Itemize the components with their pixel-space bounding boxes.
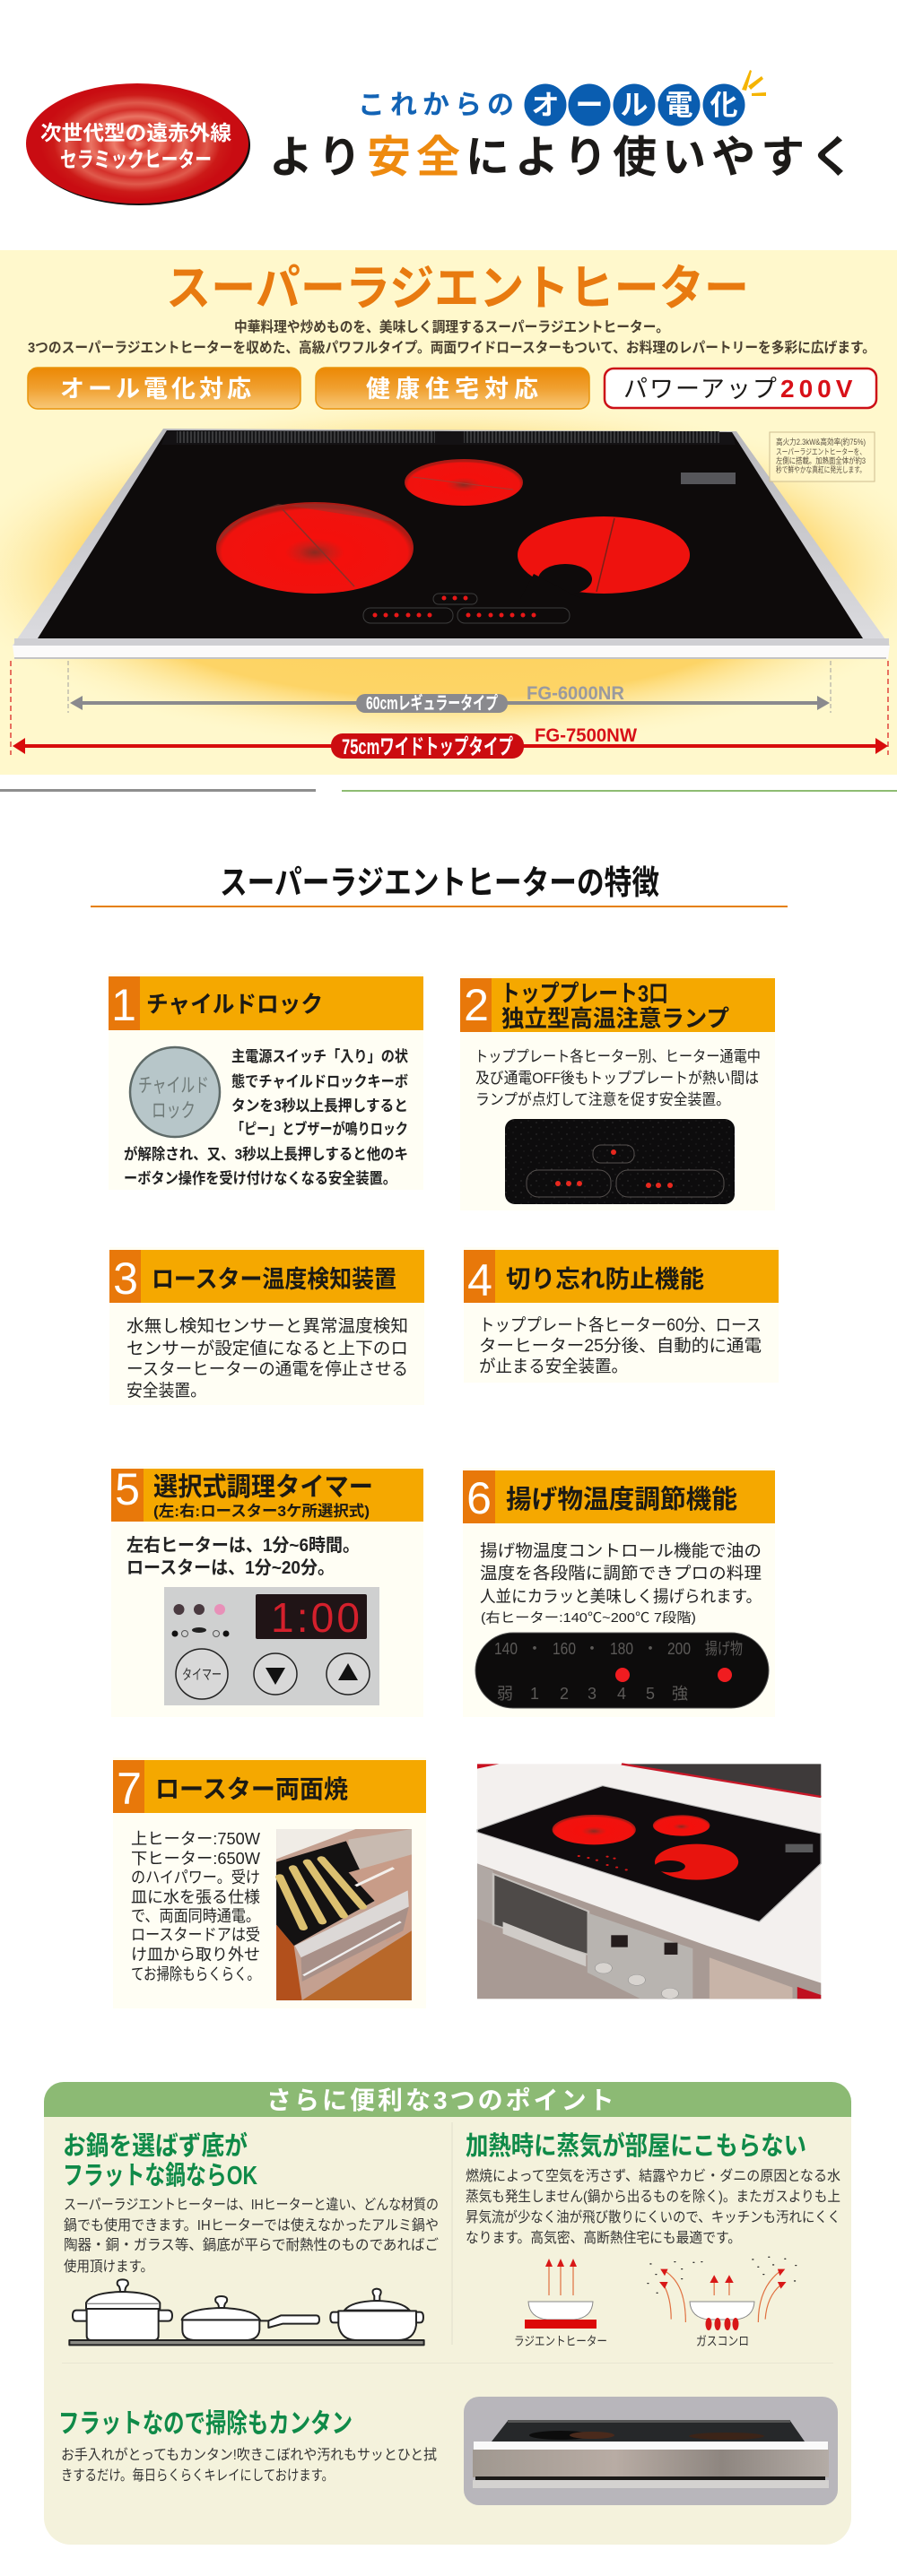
badge: healthy housing compatible: 健康住宅対応: [366, 376, 544, 403]
intro text: 中華料理や炒めものを、美味しく調理するスーパーラジエントヒーター。: [234, 319, 669, 335]
tagline: safer and easier to use: より安全により使いやすく: [269, 134, 859, 182]
caption: high power note: [770, 432, 875, 481]
badge: all-electric compatible: オール電化対応: [60, 376, 255, 403]
card 6: fry temperature control: [463, 1468, 775, 1717]
photo: fry temperature panel: 1: [530, 1685, 539, 1703]
photo: timer panel: 1:00: [271, 1594, 360, 1641]
point: any flat-bottom pot: お鍋を選ばず底が: [63, 2130, 248, 2161]
card 3: roaster temperature detector: [109, 1247, 424, 1405]
badge: all-electric compatible: [28, 368, 300, 409]
card 7: roaster double-sided grilling: てお掃除もらくらく。: [131, 1965, 260, 1983]
photo: kitchen installation: [477, 1764, 821, 1999]
card 7: roaster double-sided grilling: 皿に水を張る仕様: [131, 1888, 260, 1906]
card 1: child lock: チャイルドロック: [146, 991, 323, 1018]
photo: fry temperature panel: ・: [527, 1640, 543, 1658]
card 5: selectable cooking timer: ロースターは、1分~20分。: [126, 1557, 335, 1578]
icon: child lock button: チャイルド: [138, 1074, 209, 1097]
point: any flat-bottom pot: スーパーラジエントヒーターは、IHヒーターと違い、どんな材質の: [64, 2197, 439, 2213]
burner: left: [216, 502, 414, 594]
photo: fry temperature panel: 180: [610, 1640, 633, 1658]
photo: fry temperature panel: 2: [560, 1685, 569, 1703]
point: no steam in the room: 加熱時に蒸気が部屋にこもらない: [466, 2130, 806, 2161]
control panel LEDs: [363, 594, 570, 623]
card 6: fry temperature control: (右ヒーター:140℃~200℃ 7段階): [481, 1610, 696, 1626]
icon: three pots on cooktop: [69, 2279, 424, 2345]
card 1: child lock: 「ピー」とブザーが鳴りロック: [231, 1120, 408, 1138]
card 4: forget-to-turn-off prevention: トッププレート各ヒーター60分、ロース: [479, 1315, 762, 1335]
badge: next-generation far-infrared ceramic heater: セラミックヒーター: [60, 148, 212, 172]
card 5: selectable cooking timer: 5: [115, 1464, 140, 1514]
icon: child lock button: ロック: [152, 1099, 196, 1122]
card 2: top plate high temperature lamps: 独立型高温注意ランプ: [501, 1005, 729, 1032]
photo: front view of cooktop: [464, 2397, 838, 2505]
dimension: 75cm wide top type: FG-7500NW: [535, 725, 637, 746]
burner: rear: [405, 459, 523, 506]
card 2: top plate high temperature lamps: 及び通電OFF後もトッププレートが熱い間は: [475, 1070, 759, 1087]
card 4: forget-to-turn-off prevention: 切り忘れ防止機能: [506, 1266, 704, 1293]
card 4: forget-to-turn-off prevention: 4: [467, 1255, 492, 1305]
dimension: 60cm regular type: FG-6000NR: [527, 683, 624, 704]
tagline: all-electric future: これからの: [358, 91, 519, 120]
point: no steam in the room: なります。高気密、高断熱住宅にも最適です。: [466, 2230, 741, 2246]
card 1: child lock: ーボタン操作を受け付けなくなる安全装置。: [124, 1170, 396, 1187]
card 2: top plate high temperature lamps: トッププレート3口: [501, 980, 668, 1007]
burner: right with notch: [518, 516, 690, 599]
card 3: roaster temperature detector: ロースター温度検知装置: [152, 1266, 396, 1293]
card 6: fry temperature control: 人並にカラッと美味しく揚げられます。: [480, 1587, 762, 1606]
dimension: 60cm regular type: 60cmレギュラータイプ: [366, 693, 498, 714]
photo: timer panel: [164, 1587, 379, 1705]
card 7: roaster double-sided grilling: ロースタードアは受: [131, 1926, 260, 1944]
card 7: roaster double-sided grilling: 7: [117, 1764, 142, 1814]
card 1: child lock: タンを3秒以上長押しすると: [231, 1097, 408, 1115]
icon: child lock button: [130, 1047, 220, 1137]
point: any flat-bottom pot: 鍋でも使用できます。IHヒーターでは使えなかったアルミ鍋や: [64, 2217, 439, 2233]
card 7: roaster double-sided grilling: のハイパワー。受け: [131, 1869, 260, 1886]
heading: features of Super Radiant Heater: スーパーラジエントヒーターの特徴: [220, 864, 659, 901]
photo: fry temperature panel: 5: [646, 1685, 655, 1703]
tagline: all-electric future: オ: [531, 90, 560, 121]
card 7: roaster double-sided grilling: 上ヒーター:750W: [131, 1830, 260, 1848]
card 5: selectable cooking timer: [111, 1464, 423, 1717]
caption: high power note: スーパーラジエントヒーターを、: [776, 447, 866, 456]
card 5: selectable cooking timer: 選択式調理タイマー: [153, 1472, 373, 1502]
card 5: selectable cooking timer: (左:右:ロースター3ケ所選択式): [153, 1503, 370, 1520]
point: flat and easy to clean: お手入れがとってもカンタン!吹きこぼれや汚れもサッとひと拭: [61, 2447, 437, 2463]
badge: next-generation far-infrared ceramic heater: [26, 83, 250, 205]
card 3: roaster temperature detector: ースターヒーターの通電を停止させる: [126, 1359, 408, 1379]
caption: high power note: 左側に搭載。加熱面全体が約3: [776, 455, 866, 465]
point: no steam in the room: 昇気流が少なく油が飛び散りにくいので、キッチンも汚れにくく: [466, 2209, 840, 2225]
caption: high power note: 高火力2.3kW&高効率(約75%): [776, 437, 866, 447]
card 3: roaster temperature detector: センサーが設定値になると上下のロ: [126, 1339, 408, 1358]
badge: power up 200V: 200V: [780, 375, 857, 403]
tagline: all-electric future: [358, 70, 766, 126]
tagline: all-electric future: ル: [621, 90, 648, 121]
card 4: forget-to-turn-off prevention: [464, 1247, 779, 1383]
badge: power up 200V: [605, 369, 876, 408]
panel: three more convenient points: [44, 2082, 851, 2545]
panel: three more convenient points: さらに便利な3つのポイント: [266, 2086, 617, 2114]
card 7: roaster double-sided grilling: ロースター両面焼: [155, 1775, 348, 1803]
point: any flat-bottom pot: フラットな鍋ならOK: [63, 2161, 257, 2190]
point: flat and easy to clean: きするだけ。毎日らくらくキレイにしておけます。: [61, 2468, 334, 2484]
card 6: fry temperature control: 6: [466, 1473, 492, 1523]
title: Super Radiant Heater: スーパーラジエントヒーター: [166, 262, 749, 316]
card 2: top plate high temperature lamps: ランプが点灯して注意を促す安全装置。: [475, 1091, 730, 1108]
point: no steam in the room: 蒸気も発生しません(鍋から出るものを除く)。またガスよりも上: [466, 2189, 840, 2205]
card 3: roaster temperature detector: 水無し検知センサーと異常温度検知: [126, 1316, 408, 1336]
dimension: 75cm wide top type: 75cmワイドトップタイプ: [342, 735, 513, 759]
card 2: top plate high temperature lamps: トッププレート各ヒーター別、ヒーター通電中: [475, 1048, 761, 1065]
card 7: roaster double-sided grilling: け皿から取り外せ: [131, 1946, 260, 1964]
card 7: roaster double-sided grilling: 下ヒーター:650W: [131, 1850, 260, 1868]
diagram: gas stove airflow: [647, 2257, 797, 2348]
card 3: roaster temperature detector: 安全装置。: [126, 1381, 206, 1401]
point: no steam in the room: 燃焼によって空気を汚さず、結露やカビ・ダニの原因となる水: [466, 2168, 840, 2184]
photo: fry temperature panel: 160: [553, 1640, 576, 1658]
card 6: fry temperature control: 温度を各段階に調節できプロの料理: [480, 1564, 762, 1583]
point: any flat-bottom pot: 使用頂けます。: [64, 2259, 153, 2275]
photo: fry temperature panel: [475, 1633, 769, 1708]
badge: healthy housing compatible: [316, 368, 589, 409]
intro text: [28, 319, 875, 356]
badge: next-generation far-infrared ceramic heater: 次世代型の遠赤外線: [40, 121, 231, 144]
tagline: all-electric future: ー: [576, 90, 603, 121]
diagram: radiant heater airflow: ラジエントヒーター: [514, 2334, 607, 2348]
card 1: child lock: 1: [111, 980, 136, 1030]
dimension: 75cm wide top type: [11, 661, 888, 759]
card 7: roaster double-sided grilling: [113, 1757, 426, 2008]
photo: fry temperature panel: 3: [588, 1685, 597, 1703]
card 1: child lock: が解除され、又、3秒以上長押しすると他のキ: [124, 1145, 408, 1163]
photo: lit control lamps: [505, 1119, 735, 1204]
diagram: gas stove airflow: ガスコンロ: [696, 2334, 749, 2348]
card 6: fry temperature control: 揚げ物温度コントロール機能で油の: [480, 1541, 762, 1560]
tagline: all-electric future: 電: [666, 90, 692, 121]
photo: roaster drawer with fish: [276, 1829, 412, 2000]
photo: fry temperature panel: 4: [617, 1685, 626, 1703]
card 6: fry temperature control: 揚げ物温度調節機能: [506, 1485, 737, 1514]
card 2: top plate high temperature lamps: [460, 975, 775, 1210]
photo: fry temperature panel: 揚げ物: [705, 1640, 743, 1658]
card 1: child lock: 態でチャイルドロックキーボ: [231, 1073, 408, 1090]
photo: fry temperature panel: 強: [672, 1685, 688, 1703]
card 7: roaster double-sided grilling: で、両面同時通電。: [131, 1907, 260, 1925]
panel: product hero on yellow background: [0, 250, 897, 775]
card 4: forget-to-turn-off prevention: ターヒーター25分後、自動的に通電: [479, 1336, 762, 1356]
card 2: top plate high temperature lamps: 2: [464, 980, 489, 1030]
point: flat and easy to clean: フラットなので掃除もカンタン: [58, 2409, 353, 2439]
point: any flat-bottom pot: [63, 2130, 439, 2345]
tagline: all-electric future: 化: [710, 90, 737, 121]
diagram: radiant heater airflow: [514, 2259, 607, 2348]
photo: fry temperature panel: 140: [494, 1640, 518, 1658]
card 1: child lock: 主電源スイッチ「入り」の状: [231, 1048, 408, 1065]
point: flat and easy to clean: [58, 2409, 437, 2484]
badge: power up 200V: パワーアップ: [623, 376, 779, 403]
card 4: forget-to-turn-off prevention: が止まる安全装置。: [479, 1357, 628, 1376]
illustration: cooktop: [13, 429, 890, 659]
card 5: selectable cooking timer: 左右ヒーターは、1分~6時間。: [126, 1535, 360, 1556]
card 3: roaster temperature detector: 3: [113, 1253, 138, 1304]
photo: fry temperature panel: 弱: [497, 1685, 513, 1703]
dimension: 60cm regular type: [68, 661, 831, 714]
caption: high power note: 秒で鮮やかな真紅に発光します。: [776, 464, 866, 474]
photo: fry temperature panel: 200: [667, 1640, 691, 1658]
photo: fry temperature panel: ・: [584, 1640, 600, 1658]
point: no steam in the room: [466, 2130, 840, 2348]
card 1: child lock: [109, 973, 423, 1190]
photo: timer panel: タイマー: [182, 1667, 222, 1683]
point: any flat-bottom pot: 陶器・銅・ガラス等、鍋底が平らで耐熱性のものであればご: [64, 2237, 439, 2253]
photo: fry temperature panel: ・: [642, 1640, 658, 1658]
